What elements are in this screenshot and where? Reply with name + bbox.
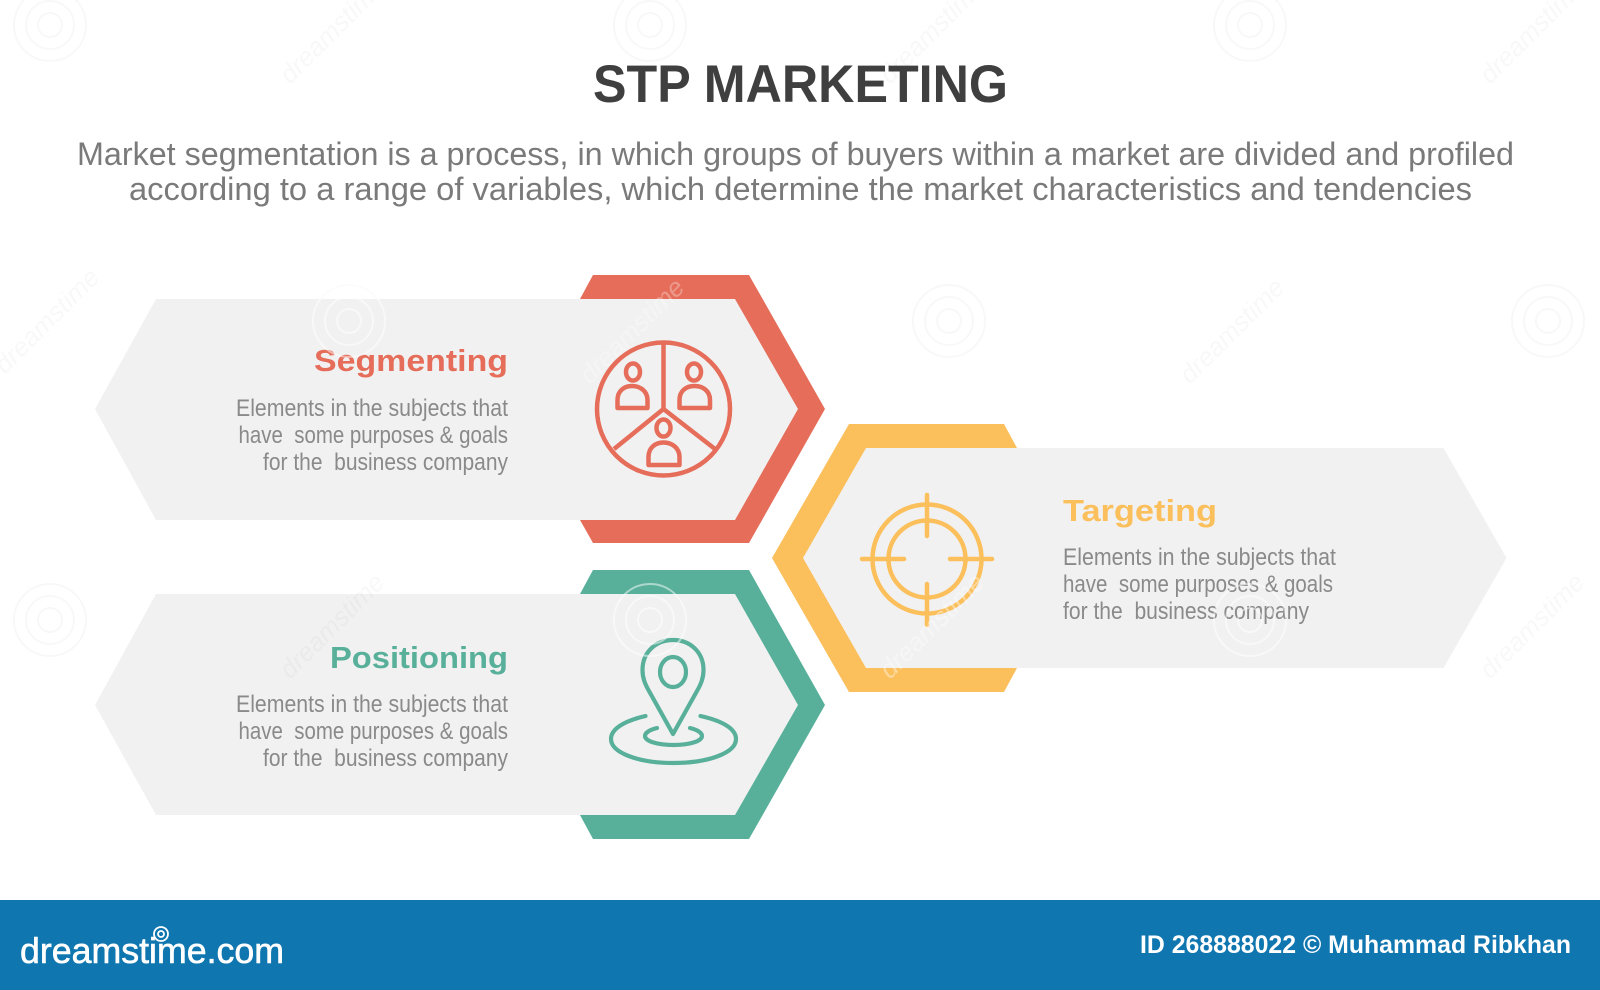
targeting description (1063, 544, 1336, 625)
watermark text: dreamstime (1173, 272, 1290, 389)
watermark text: dreamstime (873, 567, 990, 684)
watermark text: dreamstime (573, 272, 690, 389)
watermark text (0, 0, 1590, 684)
subtitle text block: according to a range of variables, which determine the market characteristics and tendencies (129, 171, 1472, 207)
image id and credit: ID 268888022 © Muhammad Ribkhan (1140, 931, 1571, 959)
icon: location pin (611, 640, 736, 763)
segmenting heading: Segmenting (314, 343, 508, 378)
panel: targeting (772, 424, 1506, 692)
positioning grey arrow card (95, 594, 798, 815)
positioning hexagon frame (580, 570, 825, 839)
icon: segmented audience circle (597, 342, 730, 476)
watermark text: dreamstime (1473, 567, 1590, 684)
positioning description: have some purposes & goals (238, 718, 508, 745)
panel: positioning (95, 570, 825, 839)
footer bar (0, 900, 1600, 990)
targeting description: have some purposes & goals (1063, 571, 1333, 598)
positioning heading: Positioning (330, 640, 508, 675)
targeting heading: Targeting (1063, 493, 1217, 528)
segmenting description: Elements in the subjects that (236, 395, 508, 422)
watermark spirals on cards (313, 285, 1286, 656)
watermark text: dreamstime (273, 567, 390, 684)
subtitle text block: Market segmentation is a process, in which groups of buyers within a market are divided and profiled (77, 136, 1514, 172)
footer logo: dreamstime.com (20, 930, 284, 971)
segmenting hexagon frame (580, 275, 825, 543)
subtitle text block (77, 136, 1514, 207)
watermark spirals on white (14, 0, 1584, 656)
targeting description: Elements in the subjects that (1063, 544, 1336, 571)
segmenting grey arrow card (95, 299, 798, 520)
panel: segmenting (95, 275, 825, 543)
segmenting description (236, 395, 509, 476)
targeting description: for the business company (1063, 598, 1310, 625)
positioning description (236, 691, 509, 772)
icon: crosshair target (862, 495, 992, 625)
segmenting description: for the business company (263, 449, 509, 476)
positioning description: Elements in the subjects that (236, 691, 508, 718)
positioning description: for the business company (263, 745, 509, 772)
targeting hexagon frame (772, 424, 1017, 692)
icon: logo spiral (154, 927, 168, 941)
title: STP MARKETING (593, 55, 1008, 114)
targeting grey arrow card (803, 448, 1506, 668)
segmenting description: have some purposes & goals (238, 422, 508, 449)
